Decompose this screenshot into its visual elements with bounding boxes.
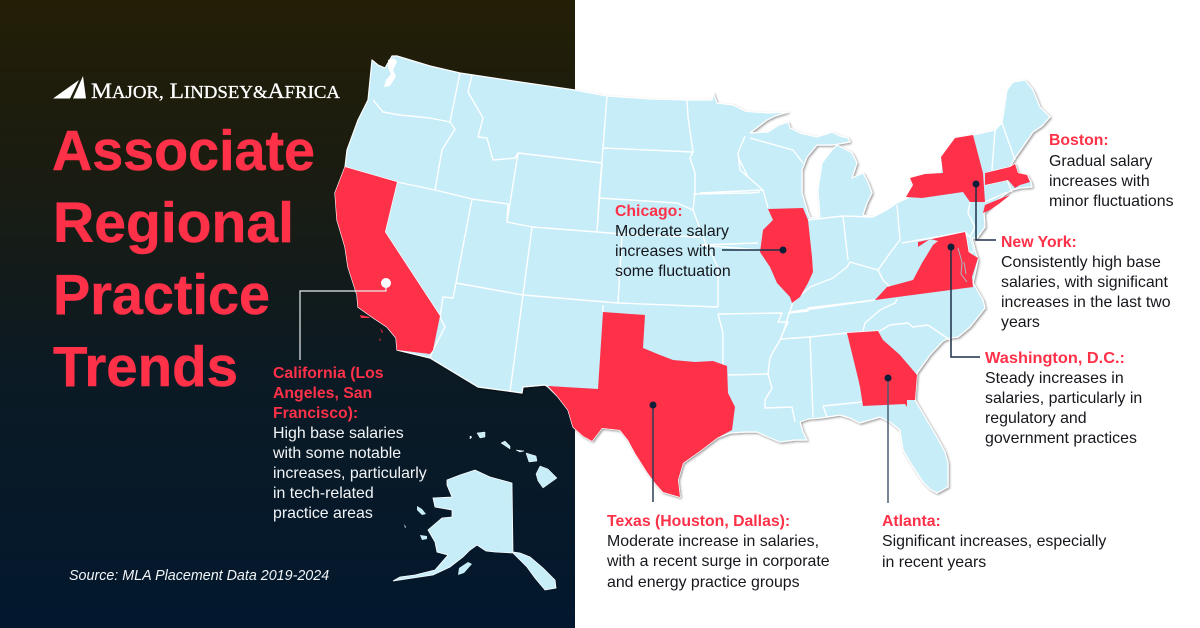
callout: Atlanta: Significant increases, especially (882, 533, 1106, 550)
callout: Boston: increases with (1049, 173, 1150, 190)
connector dots (300, 180, 996, 503)
Chesapeake Bay (958, 248, 967, 282)
callout: New York: Consistently high base (1001, 254, 1161, 271)
callout: California: in tech-related (273, 485, 374, 502)
title: Regional (53, 191, 294, 255)
logo wordmark: MAJOR, LINDSEY&AFRICA (91, 78, 340, 103)
state borders (345, 73, 1015, 422)
callout: Texas: Moderate increase in salaries, (607, 533, 819, 550)
callout: Texas: and energy practice groups (607, 574, 800, 591)
source note: Source: MLA Placement Data 2019-2024 (69, 568, 329, 584)
connector: Washington (948, 244, 980, 357)
callout: California: increases, particularly (273, 465, 427, 482)
dark left background panel (0, 0, 575, 628)
callout: California: Francisco): (273, 405, 358, 422)
state: Texas (548, 312, 735, 497)
callout: Texas (606, 513, 830, 591)
state: New York (906, 135, 985, 202)
state: Delaware (966, 233, 974, 252)
callout: New York: increases in the last two (1001, 294, 1171, 311)
callout: Washington, D.C.: government practices (985, 430, 1137, 447)
callout: New York: years (1001, 314, 1040, 331)
state: Georgia (847, 331, 917, 407)
callout: California: High base salaries (273, 425, 404, 442)
Alaska (393, 470, 556, 590)
callout: Washington, D.C.: Washington, D.C.: (985, 350, 1125, 367)
Long Island (983, 195, 1010, 213)
connector: California (300, 278, 391, 360)
map of the contiguous United States (300, 56, 1050, 590)
callout: Washington, D.C.: regulatory and (985, 410, 1087, 427)
callout: Washington, D.C.: Steady increases in (985, 370, 1124, 387)
callout: Chicago: Moderate salary (615, 223, 729, 240)
callout: California: Angeles, San (273, 385, 372, 402)
Hawaii (470, 432, 557, 488)
connector: Texas (650, 402, 656, 502)
callout: California (272, 365, 427, 522)
callout: Chicago: increases with (615, 243, 716, 260)
callout: Chicago: some fluctuation (615, 263, 731, 280)
callout: Chicago: Chicago: (615, 203, 683, 220)
connector: New York (972, 180, 996, 240)
state: Illinois (760, 208, 813, 303)
title: Practice (53, 263, 270, 327)
callout: Texas: Texas (Houston, Dallas): (607, 513, 790, 530)
callout: Boston: Gradual salary (1049, 153, 1152, 170)
callout: Boston (1049, 132, 1174, 210)
callout: Atlanta: Atlanta: (882, 513, 941, 530)
callout: Boston: minor fluctuations (1049, 193, 1174, 210)
state: Massachusetts (985, 164, 1030, 188)
callout: California: with some notable (272, 445, 401, 462)
title (52, 119, 315, 399)
connector: Chicago (722, 246, 786, 254)
callout: California: California (Los (273, 365, 384, 382)
title: Associate (52, 119, 315, 183)
callout: Boston: Boston: (1049, 132, 1109, 149)
callout: Washington, D.C. (985, 350, 1142, 447)
callout: Atlanta: in recent years (882, 554, 986, 571)
callout: New York: New York: (1001, 234, 1077, 251)
callout: New York: salaries, with significant (1001, 274, 1169, 291)
connector: Atlanta (884, 374, 892, 503)
Puget Sound cutout (384, 58, 397, 87)
logo icon (53, 76, 86, 98)
callout: Washington, D.C.: salaries, particularly in (985, 390, 1142, 407)
callout: Chicago (615, 203, 731, 280)
California islands (360, 315, 383, 341)
map land outline (335, 56, 1050, 497)
callout: New York (1001, 234, 1171, 331)
logo: Major, Lindsey & Africa (53, 76, 340, 103)
states: Virginia and Maryland (875, 232, 978, 300)
Alaskan islands (404, 506, 472, 575)
callout: Texas: with a recent surge in corporate (606, 553, 830, 570)
state: California (335, 167, 440, 354)
callout: Atlanta (882, 513, 1106, 571)
title: Trends (53, 335, 238, 399)
callout: California: practice areas (273, 505, 373, 522)
